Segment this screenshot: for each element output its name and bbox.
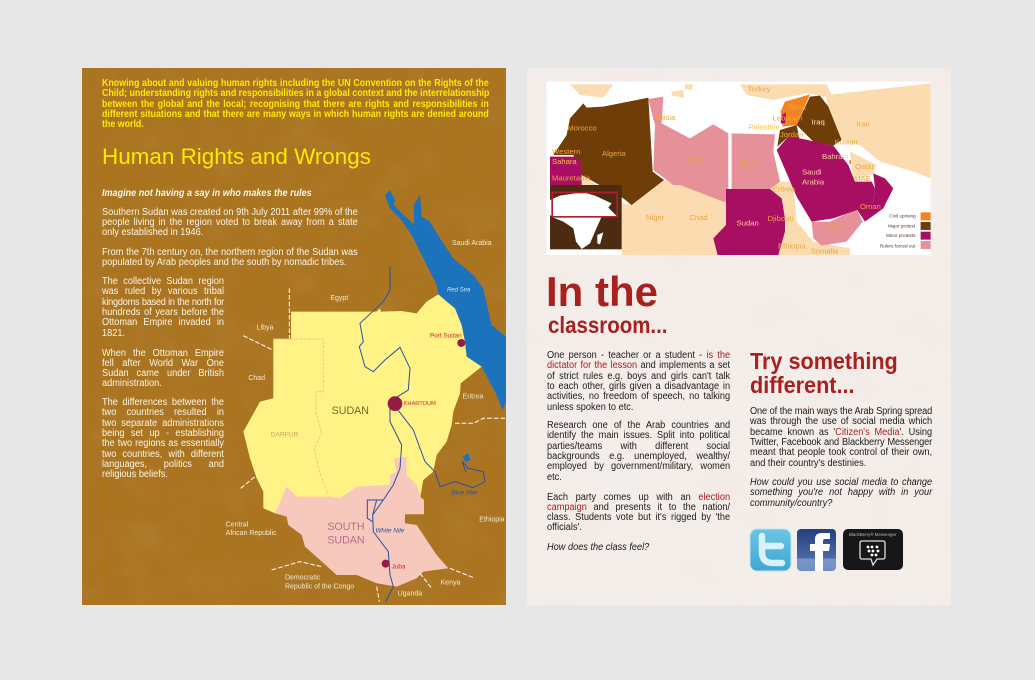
- minor protests: [550, 112, 893, 255]
- text: paragraph 5: the two regions as essentially: [102, 438, 224, 449]
- map country labels: Eritrea: [773, 185, 796, 194]
- text: paragraph 5: two countries resulted in: [102, 407, 224, 418]
- text: paragraph 1: people living in the region voted to break away from a state: [102, 217, 358, 228]
- map country labels: Sahara: [552, 157, 577, 166]
- map: Sudan and South Sudan: Juba: [392, 563, 406, 570]
- text: paragraph 3: was ruled by various tribal: [102, 286, 224, 297]
- text: social media: was through the use of social media which: [750, 416, 932, 427]
- heading: Human Rights and Wrongs: Human Rights and Wrongs: [102, 144, 371, 169]
- map country labels: Qatar: [855, 162, 875, 171]
- text: research activity: etc.: [547, 472, 562, 483]
- map country labels: Ethiopia: [778, 241, 806, 250]
- panel: classroom (right page): [527, 68, 951, 605]
- heading: classroom: classroom...: [548, 312, 667, 338]
- map labels: Saudi Arabia: [452, 240, 492, 247]
- icon: BlackBerry Messenger: [843, 529, 903, 570]
- map labels: Egypt: [330, 295, 348, 302]
- text: paragraph 1: Southern Sudan was created on 9th July 2011 after 99% of the: [102, 206, 358, 218]
- text: paragraph 4: administration.: [102, 378, 162, 389]
- text: dictator activity: [547, 350, 730, 413]
- map: Sudan and South Sudan: White Nile: [375, 528, 405, 535]
- map: Sudan and South Sudan: Red Sea: [447, 288, 471, 294]
- text: paragraph 3: hundreds of years before the: [102, 307, 224, 318]
- text: election activity: campaign and presents it to the nation/: [547, 502, 730, 513]
- text: paragraph 5: [102, 397, 224, 480]
- city markers: [382, 339, 465, 568]
- map legend: Rulers forced out: [880, 243, 916, 248]
- text: paragraph 4: When the Ottoman Empire: [102, 348, 224, 358]
- text: paragraph 5: languages, politics and: [102, 459, 224, 470]
- text: paragraph 2: populated by Arab peoples and the south by nomadic tribes.: [102, 257, 346, 268]
- map country labels: Iraq: [812, 117, 825, 126]
- rivers: Nile: [359, 267, 410, 602]
- map: Sudan and South Sudan: KHARTOUM: [404, 401, 436, 407]
- text: paragraph 5: religious beliefs.: [102, 469, 168, 480]
- text: dictator activity: unless spoken to etc.: [547, 402, 633, 413]
- map: Sudan and South Sudan: SUDAN: [327, 535, 365, 547]
- text: paragraph 3: [102, 276, 224, 339]
- text: paragraph 3: Ottoman Empire invaded in: [102, 317, 224, 328]
- text: election activity: class. Students vote but it's rigged by 'the: [547, 512, 730, 523]
- map country labels: Kuwait: [835, 137, 858, 146]
- map: Sudan and South Sudan: SUDAN: [332, 405, 369, 417]
- text: dictator activity: of strict rules e.g. boys and girls can't talk: [547, 371, 730, 382]
- map country labels: Arabia: [802, 177, 825, 186]
- text: paragraph 4: fell after World War One: [102, 358, 224, 369]
- text: paragraph 3: 1821.: [102, 328, 125, 339]
- map country labels: UAE: [855, 174, 871, 183]
- text: dictator activity: activities, no freedom of speech, no talking: [547, 391, 730, 402]
- civil uprising: [781, 94, 810, 127]
- map labels: Libya: [257, 324, 273, 331]
- icon: Facebook: [797, 529, 836, 571]
- text: paragraph 5: The differences between the: [102, 397, 224, 408]
- heading: Try something different: Try something: [750, 348, 898, 374]
- Lake Tana: [463, 453, 471, 462]
- map country labels: Yemen: [825, 223, 849, 232]
- map country labels: Tunisia: [651, 113, 676, 122]
- map country labels: Niger: [646, 213, 665, 222]
- text: paragraph 4: [102, 348, 224, 389]
- map labels: Kenya: [441, 580, 461, 587]
- map legend: Civil uprising: [889, 214, 916, 219]
- text: social media: [750, 406, 932, 469]
- map legend: Major protest: [888, 223, 916, 228]
- text: paragraph 5: two countries, with different: [102, 449, 224, 460]
- inset map: Africa: [550, 185, 622, 249]
- map country labels: Sudan: [737, 219, 759, 228]
- text: social media: and their country's destinies.: [750, 458, 866, 469]
- text: social media question: [750, 477, 932, 509]
- map: Sudan and South Sudan: DARFUR: [271, 432, 299, 439]
- subheading: Imagine not having a say in who makes the rules: [102, 188, 312, 198]
- heading: Try something different: different...: [750, 372, 855, 398]
- text: research activity: employed by government/military, women: [547, 461, 730, 472]
- map: Sudan and South Sudan: SOUTH: [327, 521, 365, 533]
- map country labels: Oman: [860, 202, 881, 211]
- map country labels: Somalia: [811, 246, 839, 255]
- text: election activity: Each party comes up with an election: [547, 492, 730, 502]
- map country labels: Lebanon: [773, 113, 802, 122]
- Red Sea: [385, 190, 506, 410]
- map country labels: Algeria: [602, 149, 627, 158]
- map country labels: Jordan: [780, 130, 803, 139]
- rivers: Blue Nile: [397, 408, 485, 488]
- text: paragraph 5: being set up - establishing: [102, 428, 224, 439]
- text: research activity: [547, 420, 730, 483]
- map country labels: Morocco: [567, 123, 597, 132]
- map labels: Democratic: [285, 575, 321, 582]
- text: social media question: How could you use social media to change: [750, 477, 932, 488]
- text: paragraph 3: The collective Sudan region: [102, 276, 224, 287]
- panel: human rights (left page): [82, 68, 506, 605]
- text: social media: became known as 'Citizen's Media'. Using: [750, 427, 932, 438]
- text: dictator activity: to each other, girls given a disadvantage in: [547, 381, 730, 392]
- map labels: Ethiopia: [479, 517, 505, 524]
- map: Sudan and South Sudan: Port Sudan: [430, 333, 462, 340]
- intro text: Knowing about and valuing human rights including the UN Convention on the Rights of the: [102, 78, 489, 89]
- map country labels: Libya: [685, 155, 704, 164]
- text: paragraph 5: two separate administrations: [102, 418, 224, 429]
- map legend: [880, 212, 931, 249]
- map legend: Minor protests: [886, 233, 916, 238]
- text: social media question: something you're not happy with in your: [750, 487, 932, 498]
- text: paragraph 2: From the 7th century on, the northern region of the Sudan was: [102, 246, 358, 258]
- map country labels: Chad: [689, 213, 708, 222]
- map country labels: Iran: [857, 119, 870, 128]
- map labels: Central: [226, 522, 249, 529]
- rulers forced out: [648, 97, 863, 246]
- text: paragraph 1: [102, 206, 358, 238]
- map: Sudan and South Sudan: Blue Nile: [452, 489, 477, 496]
- intro text: Child; understanding rights and responsibilities in a global context and the interrelationship: [102, 88, 489, 99]
- text: paragraph 4: Sudan came under British: [102, 368, 224, 379]
- text: election activity: officials'.: [547, 522, 582, 533]
- text: paragraph 2: [102, 246, 358, 268]
- map labels: Uganda: [398, 591, 422, 598]
- text: social media question: community/country?: [750, 498, 832, 509]
- text: paragraph 3: kingdoms based in the north for: [102, 297, 224, 308]
- map labels: Republic of the Congo: [285, 583, 354, 590]
- heading: In the: In the: [546, 268, 658, 315]
- map country labels: Western: [552, 147, 580, 156]
- text: election activity: [547, 492, 730, 533]
- map country labels: Palestine: [748, 123, 780, 132]
- map country labels: Saudi: [802, 167, 822, 176]
- peach land: [570, 83, 931, 255]
- text: social media: One of the main ways the Arab Spring spread: [750, 406, 932, 417]
- map labels: Eritrea: [463, 393, 483, 400]
- map country labels: Syria: [788, 102, 806, 111]
- South Sudan: [275, 457, 448, 587]
- heading: Try something different: [750, 348, 898, 398]
- map country labels: Bahrain: [822, 152, 848, 161]
- icon: Twitter: [750, 529, 791, 571]
- text: dictator activity: dictator for the lesson and implements a set: [547, 360, 730, 371]
- intro text: between the global and the local; recognising that there are rights and responsibilities in: [102, 99, 489, 110]
- country borders: [241, 288, 506, 602]
- intro text: different situations and that there are many ways in which human rights are denied around: [102, 109, 489, 120]
- map labels: African Republic: [226, 530, 277, 537]
- text: dictator activity: One person - teacher or a student - is the: [547, 350, 730, 361]
- map country labels: Djibouti: [768, 214, 793, 223]
- map country labels: Mauretania: [552, 173, 591, 182]
- map country labels: Turkey: [747, 85, 771, 94]
- text: research activity: backgrounds e.g. unemployed, wealthy/: [547, 451, 730, 462]
- map country labels: [552, 85, 881, 255]
- intro text: the world.: [102, 119, 144, 130]
- text: social media: Twitter, Facebook and Blackberry Messenger: [750, 437, 932, 448]
- icon: BlackBerry Messenger: BlackBerry® Messenger: [849, 532, 897, 537]
- text: social media: meant that people took control of their own,: [750, 447, 932, 458]
- text: research activity: parties/teams with different social: [547, 441, 730, 452]
- Sudan: [243, 294, 482, 513]
- text: question: How does the class feel?: [547, 542, 649, 553]
- map labels: Chad: [248, 375, 265, 382]
- map labels: [226, 240, 505, 598]
- text: paragraph 1: only established in 1946.: [102, 227, 203, 238]
- intro text: [102, 78, 489, 130]
- major protest: [553, 96, 842, 205]
- Darfur border: [273, 339, 328, 495]
- text: research activity: Research one of the Arab countries and: [547, 420, 730, 431]
- text: research activity: identify the main issues. Split into political: [547, 430, 730, 441]
- map country labels: Egypt: [741, 158, 761, 167]
